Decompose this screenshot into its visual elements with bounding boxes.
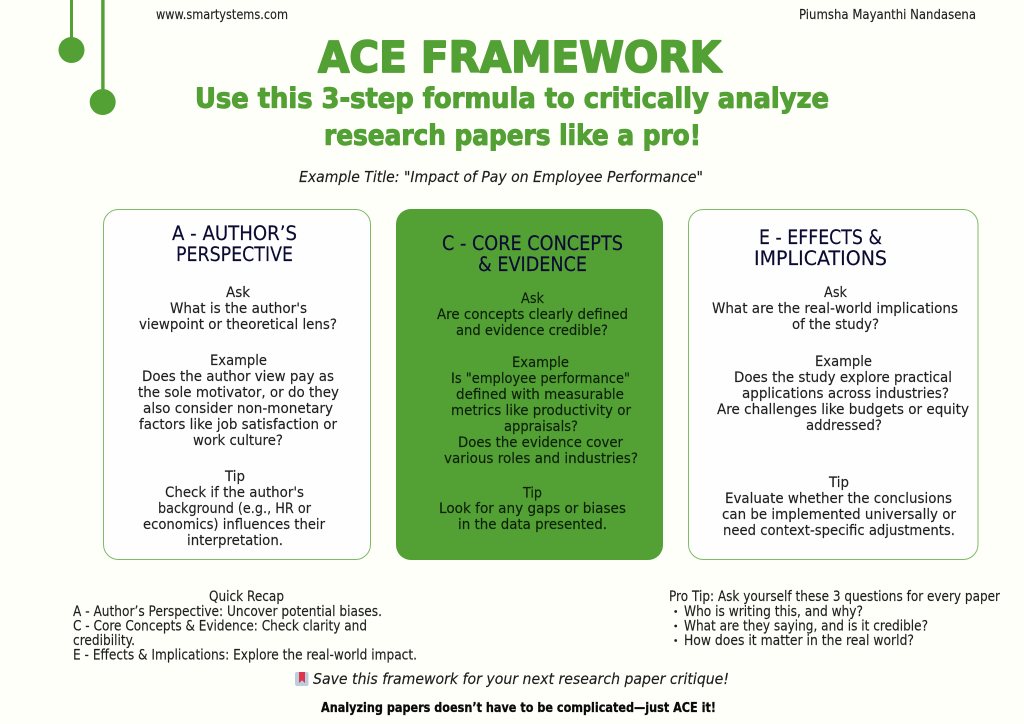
pro tip: What are they saying, and is it credible? [684,618,928,634]
subtitle: Use this 3-step formula to critically analyze [195,82,829,114]
title: ACE FRAMEWORK [318,34,723,83]
example text: A: Does the author view pay as [142,368,334,385]
ask text: E: Ask [824,284,847,301]
decorative pendant, short [58,0,84,63]
example text: C: Does the evidence cover [458,434,623,451]
heading: C [442,232,623,276]
subtitle: research papers like a pro! [324,118,701,152]
example text: C: metrics like productivity or [451,402,631,419]
pro tip: Who is writing this, and why? [684,603,863,620]
tip text: A: interpretation. [187,532,283,549]
icon: bookmark [295,672,308,686]
example text: E: addressed? [806,417,882,434]
tip text: C: Look for any gaps or biases [439,500,626,517]
tip text: E: can be implemented universally or [722,506,956,523]
example text: E: Are challenges like budgets or equity [717,401,969,418]
example text: A: factors like job satisfaction or [139,416,337,433]
quick recap [73,588,417,664]
tip text: C: in the data presented. [458,516,607,533]
example text: C: Is "employee performance" [451,370,630,387]
tip text: C: Tip [522,484,542,502]
tip text: A [143,468,325,549]
tip text: E: Tip [828,474,849,491]
ask text: C: Are concepts clearly defined [437,306,628,323]
example text: A [138,352,339,449]
heading: C: & EVIDENCE [478,253,587,276]
heading: C: C - CORE CONCEPTS [442,232,623,255]
author name: Piumsha Mayanthi Nandasena [799,8,976,23]
example text: C: appraisals? [504,418,578,435]
example text: C [444,354,638,467]
example text: C: Example [512,354,569,371]
ask text: A: What is the author's [170,300,307,317]
ask text: C: Ask [521,290,544,307]
tip text: C [439,484,626,533]
quick recap: E - Effects & Implications: Explore the real-world impact. [73,646,417,664]
quick recap: credibility. [73,632,135,649]
heading: A: PERSPECTIVE [176,243,293,266]
heading: A: A - AUTHOR’S [172,222,297,245]
tip text: A: Tip [224,468,245,485]
website label: www.smartystems.com [156,8,288,23]
ask text: A: viewpoint or theoretical lens? [139,316,337,333]
example text: A: work culture? [193,432,283,449]
example text: C: various roles and industries? [444,450,638,467]
example text: E: Example [815,353,872,370]
tip text: A: Check if the author's [165,484,304,501]
example text: A: the sole motivator, or do they [138,384,339,401]
example text: C: defined with measurable [456,386,624,403]
example text: E: applications across industries? [742,385,949,402]
panel: C - Core Concepts & Evidence [396,209,663,560]
heading: A [172,222,297,266]
heading: E: IMPLICATIONS [754,247,887,270]
heading: E [754,226,887,270]
decorative pendant, long [90,0,116,115]
tip text: E: Evaluate whether the conclusions [725,490,952,507]
ask text: E: What are the real-world implications [712,300,958,317]
quick recap: Quick Recap [209,588,284,605]
tip text: E [722,474,956,539]
example title: Example Title: "Impact of Pay on Employee Performance" [299,168,703,186]
example text: E [717,353,969,434]
heading: E: E - EFFECTS & [759,226,882,249]
tip text: A: background (e.g., HR or [158,500,311,517]
save callout: Save this framework for your next research paper critique! [313,670,729,688]
panel: E - Effects & Implications [688,210,978,560]
example text: E: Does the study explore practical [734,369,952,386]
ask text: C [437,290,628,339]
subtitle [195,82,829,152]
quick recap: C - Core Concepts & Evidence: Check clarity and [73,618,367,634]
quick recap: A - Author’s Perspective: Uncover potential biases. [73,603,382,620]
closing line: Analyzing papers doesn’t have to be complicated—just ACE it! [321,701,716,716]
pro tip: How does it matter in the real world? [684,632,914,649]
ask text: A [139,284,337,333]
pro tip [669,588,1000,649]
tip text: E: need context-specific adjustments. [723,522,955,539]
panel: A - Author's Perspective [104,210,370,560]
example text: A: also consider non-monetary [143,400,333,417]
ask text: C: and evidence credible? [456,322,608,339]
ask text: E [712,284,958,333]
ask text: A: Ask [226,284,250,301]
ask text: E: of the study? [792,316,879,333]
example text: A: Example [210,352,267,369]
tip text: A: economics) influences their [143,516,325,533]
